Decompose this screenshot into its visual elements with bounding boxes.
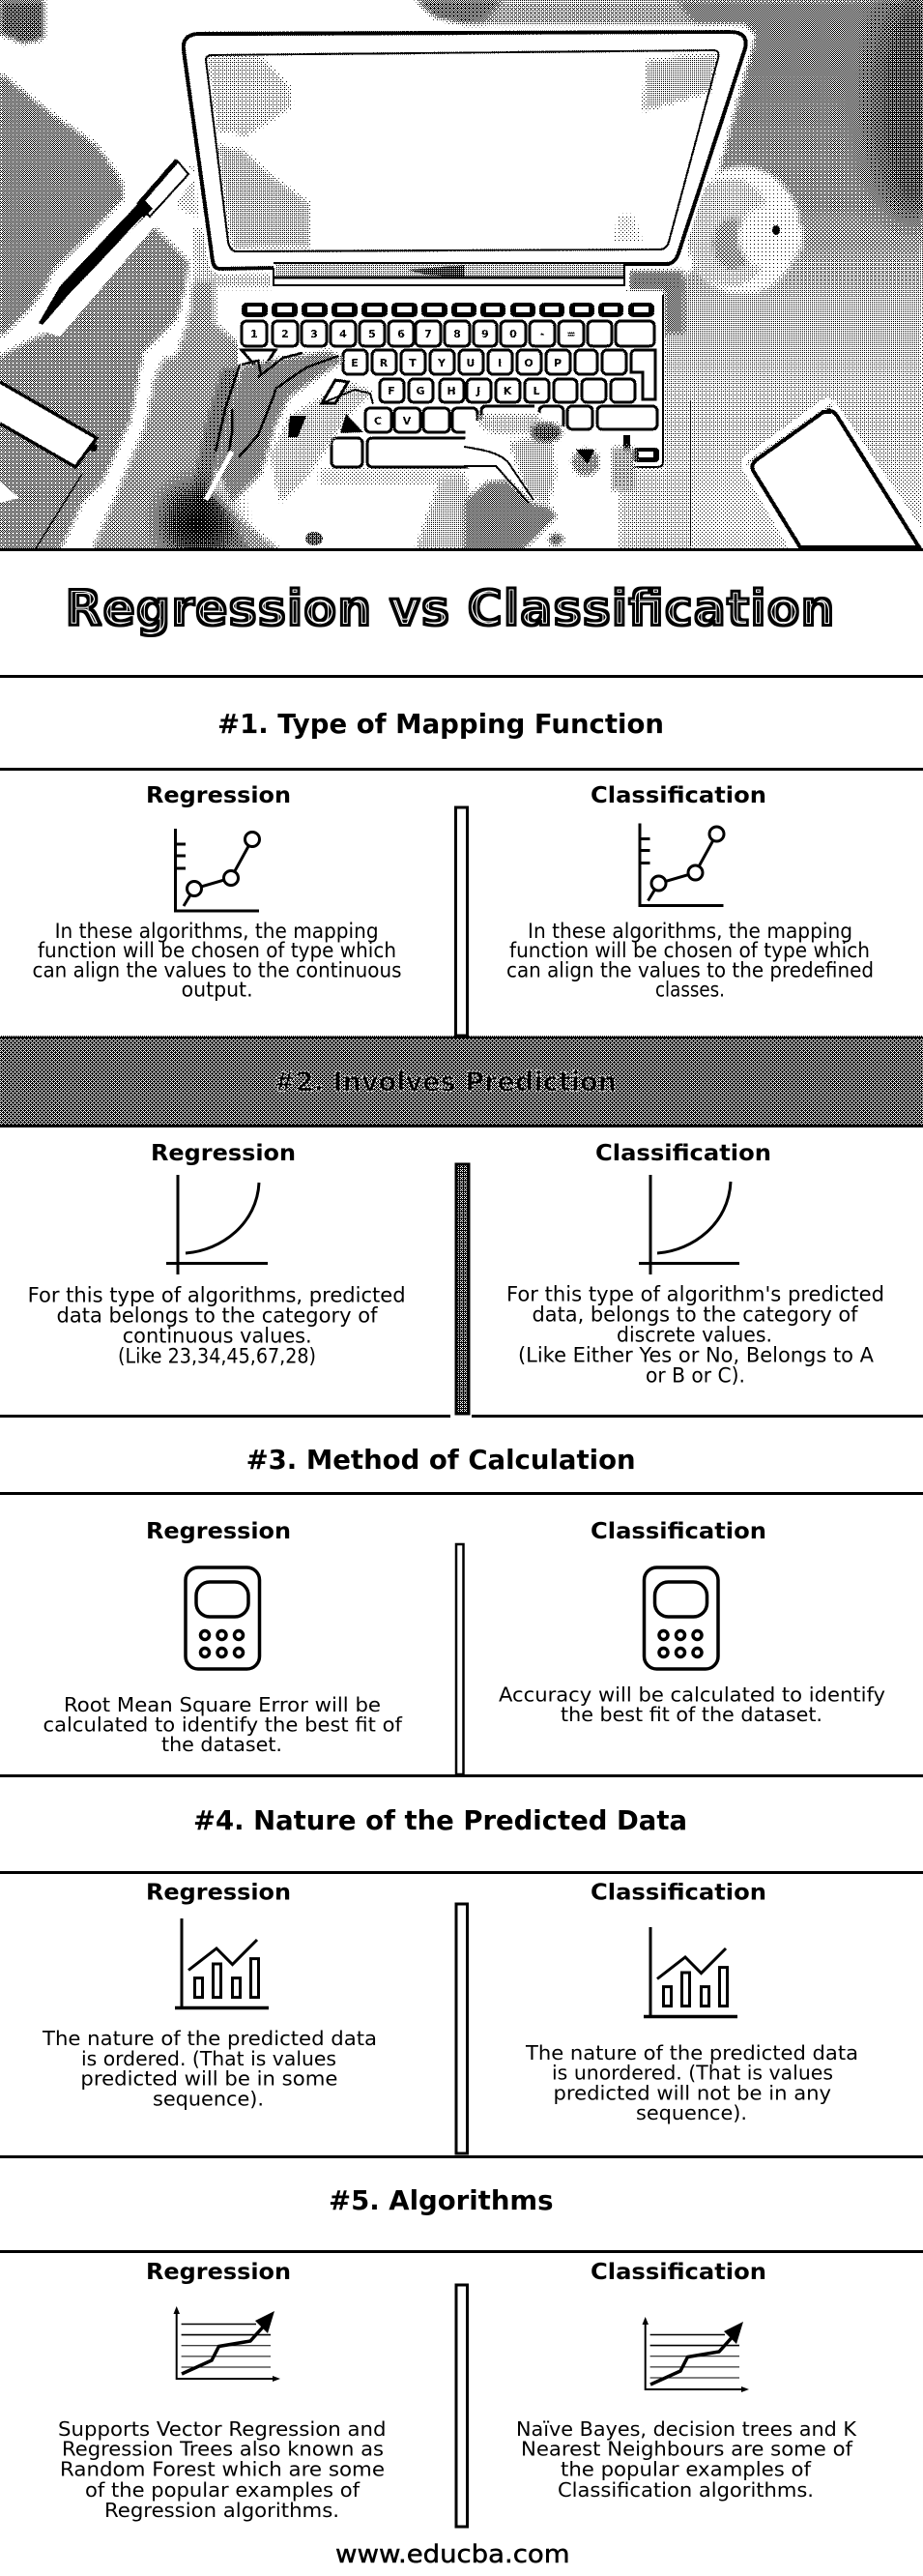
text: classification prediction: data, belongs to the category of (532, 1303, 858, 1327)
section 1 panel: regression (33, 783, 402, 1002)
text: classification mapping: can align the values to the predefined (506, 959, 874, 982)
pen halo (27, 153, 198, 337)
keyboard keys: J (476, 385, 480, 397)
section 5 heading: #5. Algorithms (329, 2184, 553, 2216)
text: classification nature: The nature of the predicted data (525, 2041, 858, 2064)
section 2 panel: regression: Regression (151, 1141, 296, 1166)
text: regression mapping (33, 920, 402, 1002)
section 3 panel: regression: Regression (146, 1519, 291, 1544)
right hand (416, 411, 635, 550)
section 2 divider fill (456, 1164, 469, 1414)
icon: bar and line chart (644, 1927, 737, 2017)
phone (746, 404, 921, 547)
section 5 panel: classification (516, 2260, 857, 2502)
keyboard keys: C (374, 415, 382, 427)
keyboard keys: 9 (481, 328, 489, 340)
section 2 panel: classification: Classification (595, 1141, 771, 1166)
section 1 heading: #1. Type of Mapping Function (217, 708, 664, 740)
notebook (0, 380, 98, 548)
keyboard keys: R (380, 357, 389, 369)
keyboard keys: E (351, 357, 359, 369)
section 5 panel: regression (58, 2260, 387, 2522)
text: classification mapping: classes. (655, 979, 725, 1002)
section 4 panel: regression (42, 1880, 377, 2110)
section 1 panel: classification: Classification (591, 783, 766, 808)
icon: bar and line chart (175, 1918, 269, 2008)
keyboard base (238, 292, 663, 466)
keyboard keys: P (554, 357, 562, 369)
icon: calculator (186, 1567, 259, 1669)
keyboard keys: - (540, 328, 544, 340)
keyboard keys: T (409, 357, 417, 369)
keyboard keys: 8 (453, 328, 461, 340)
main title: Regression vs Classification (65, 580, 835, 638)
text: regression algorithms: Random Forest which are some (60, 2458, 385, 2481)
section 4 panel: regression: Regression (146, 1880, 291, 1905)
keyboard keys: G (416, 385, 425, 397)
keyboard keys: 1 (250, 328, 258, 340)
text: regression prediction: continuous values. (123, 1325, 312, 1348)
keyboard keys: 5 (368, 328, 376, 340)
text: classification prediction: For this type of algorithm's predicted (506, 1282, 884, 1305)
photo: laptop on desk with hands typing (0, 0, 923, 1450)
section 3 divider (456, 1544, 464, 1774)
apple stem (772, 225, 780, 235)
text: classification algorithms: the popular examples of (561, 2458, 812, 2481)
section 2 heading: #2. Involves Prediction (274, 1066, 617, 1098)
section 5 divider (456, 2285, 468, 2527)
keyboard keys: F (388, 385, 395, 397)
text: classification algorithms (516, 2417, 857, 2502)
section 2 band and divider borders (0, 1037, 923, 1414)
keyboard keys: U (467, 357, 475, 369)
section 5 panel: classification: Classification (591, 2260, 766, 2285)
text: regression nature: predicted will be in some (80, 2067, 337, 2091)
text: classification algorithms: Nearest Neighbours are some of (521, 2438, 853, 2461)
text: regression calculation: the dataset. (161, 1733, 282, 1756)
text: regression algorithms: Supports Vector Regression and (58, 2417, 387, 2441)
keyboard keys: O (524, 357, 534, 369)
icon: growth curve (166, 1175, 268, 1274)
section 2 panel: classification (506, 1141, 884, 1387)
text: regression calculation: Root Mean Square Error will be (64, 1693, 381, 1716)
laptop screen (206, 50, 718, 251)
text: regression algorithms: of the popular examples of (85, 2478, 361, 2502)
text: regression calculation (43, 1693, 403, 1756)
keyboard keys: I (498, 357, 502, 369)
text: classification prediction: or B or C). (646, 1363, 745, 1387)
icon: line chart (640, 824, 724, 905)
section 3 panel: classification (499, 1519, 885, 1726)
text: classification calculation: Accuracy will be calculated to identify (499, 1683, 885, 1706)
section 2 panel: regression (28, 1141, 406, 1367)
text: classification mapping: In these algorithms, the mapping (528, 920, 852, 943)
text: classification nature: predicted will not be in any (553, 2081, 831, 2104)
text: classification algorithms: Naïve Bayes, decision trees and K (516, 2417, 857, 2441)
text: classification mapping: function will be chosen of type which (509, 939, 870, 962)
text: regression prediction: For this type of algorithms, predicted (28, 1284, 406, 1307)
text: classification prediction: discrete values. (617, 1323, 772, 1346)
text: classification algorithms: Classification algorithms. (558, 2478, 814, 2502)
text: regression nature: The nature of the predicted data (42, 2027, 377, 2050)
text: regression algorithms (58, 2417, 387, 2522)
text: regression mapping: In these algorithms, the mapping (55, 920, 379, 943)
text: regression prediction (28, 1284, 406, 1367)
keyboard keys: Y (437, 357, 447, 369)
keyboard keys (242, 303, 659, 469)
left hand (206, 350, 373, 545)
section 2 band background (0, 1036, 923, 1127)
text: regression nature: sequence). (153, 2087, 264, 2110)
pen (39, 161, 188, 325)
footer website: www.educba.com (335, 2540, 570, 2569)
text: regression prediction: data belongs to the category of (56, 1303, 378, 1327)
section 4 panel: classification: Classification (591, 1880, 766, 1905)
keyboard keys: K (504, 385, 512, 397)
keyboard keys: H (447, 385, 456, 397)
section 3 panel: regression (43, 1519, 403, 1756)
section 4 divider (456, 1904, 468, 2153)
text: regression mapping: output. (182, 979, 253, 1002)
section 1 panel: classification (506, 783, 874, 1002)
keyboard keys: L (533, 385, 540, 397)
text: regression nature: is ordered. (That is values (81, 2047, 336, 2070)
text: classification nature (525, 2041, 858, 2124)
text: classification mapping (506, 920, 874, 1002)
keyboard keys: 3 (310, 328, 318, 340)
text: classification nature: is unordered. (That is values (552, 2062, 833, 2085)
text: regression mapping: can align the values to the continuous (33, 959, 402, 982)
text: regression mapping: function will be chosen of type which (38, 939, 396, 962)
section 3 panel: classification: Classification (591, 1519, 766, 1544)
text: classification prediction: (Like Either Yes or No, Belongs to A (518, 1344, 875, 1367)
ordered dither screen (0, 0, 923, 1450)
section 5 panel: regression: Regression (146, 2260, 291, 2285)
keyboard keys: = (566, 328, 576, 340)
icon: trend chart with arrow (642, 2317, 749, 2392)
text: regression algorithms: Regression Trees also known as (62, 2438, 384, 2461)
text: classification nature: sequence). (636, 2101, 747, 2124)
section 4 heading: #4. Nature of the Predicted Data (193, 1804, 687, 1836)
text: regression algorithms: Regression algorithms. (104, 2499, 339, 2522)
keyboard keys: 4 (339, 328, 347, 340)
text: classification calculation (499, 1683, 885, 1726)
section 3 heading: #3. Method of Calculation (246, 1444, 636, 1476)
laptop lid (184, 32, 746, 285)
text: regression nature (42, 2027, 377, 2110)
icon: line chart (176, 829, 259, 911)
icon: trend chart with arrow (174, 2306, 280, 2382)
icon: growth curve (639, 1175, 739, 1274)
text: regression calculation: calculated to identify the best fit of (43, 1713, 403, 1737)
keyboard keys: 7 (424, 328, 432, 340)
keyboard keys: 2 (281, 328, 289, 340)
keyboard keys: 0 (509, 328, 517, 340)
keyboard keys: V (403, 415, 412, 427)
keyboard keys: 6 (397, 328, 405, 340)
text: classification calculation: the best fit of the dataset. (561, 1703, 822, 1726)
text: regression prediction: (Like 23,34,45,67,28) (118, 1344, 316, 1367)
rule under title (0, 675, 923, 678)
section 1 divider (456, 807, 468, 1036)
section 4 panel: classification (525, 1880, 858, 2124)
section 1 panel: regression: Regression (146, 783, 291, 808)
text: classification prediction (506, 1282, 884, 1387)
icon: calculator (644, 1567, 718, 1669)
